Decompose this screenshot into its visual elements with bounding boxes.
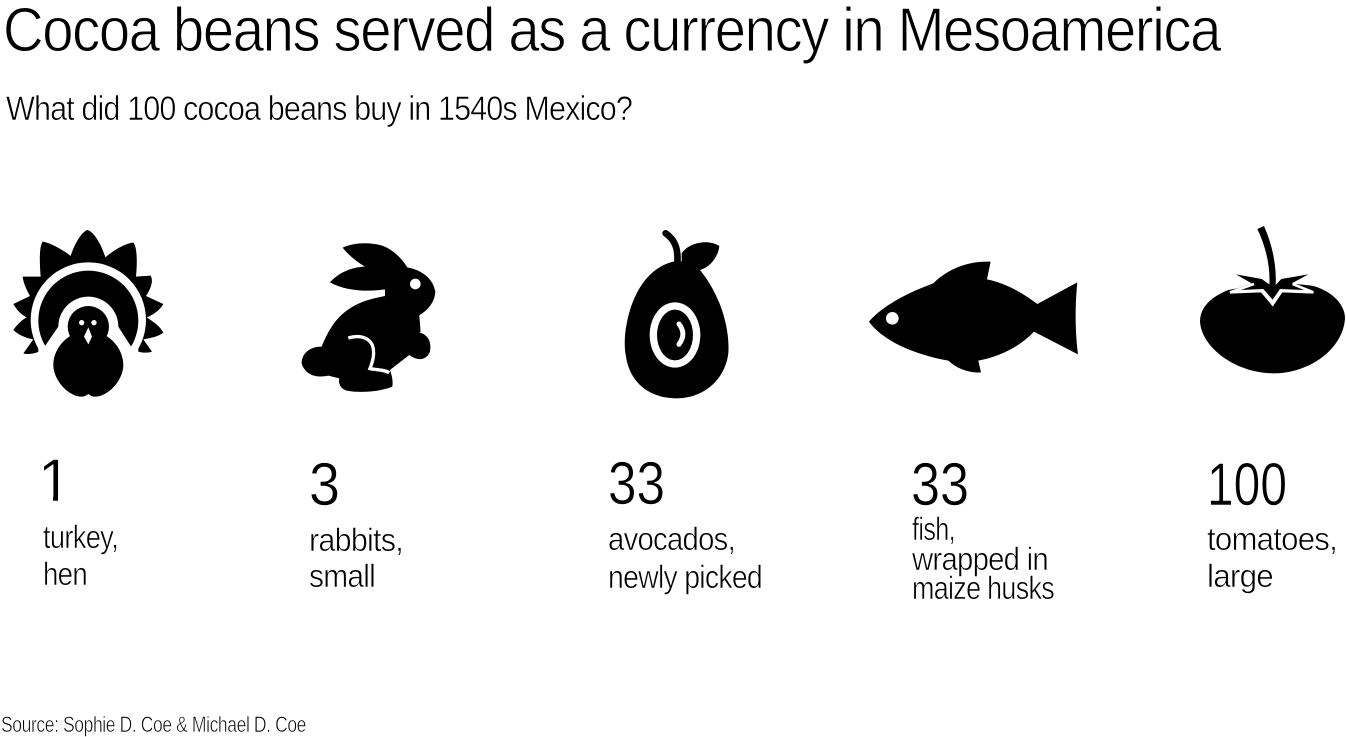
item: tomatoes: 100 (1207, 451, 1287, 518)
item: tomatoes (1207, 451, 1337, 594)
icon: fish (869, 262, 1078, 372)
item: turkey: hen (43, 556, 87, 592)
item: fish (911, 451, 1054, 606)
item: fish: fish, (912, 511, 955, 547)
item: avocados: 33 (608, 450, 665, 517)
item: turkey: 1 (38, 447, 71, 514)
item: rabbits: 3 (309, 451, 340, 518)
icon: rabbit (302, 243, 435, 392)
item: turkey: turkey, (43, 519, 118, 555)
item: tomatoes: large (1207, 558, 1273, 594)
item: fish: wrapped in (911, 541, 1048, 577)
source: Source: Sophie D. Coe & Michael D. Coe (1, 712, 306, 737)
item: tomatoes: tomatoes, (1207, 521, 1337, 557)
icon: tomato (1200, 226, 1345, 373)
item: rabbits: small (309, 558, 375, 594)
subtitle: What did 100 cocoa beans buy in 1540s Mexico? (6, 90, 632, 128)
item: fish: maize husks (912, 570, 1054, 606)
item: avocados: avocados, (608, 521, 735, 557)
item: turkey (38, 447, 118, 592)
icon: avocado (625, 233, 729, 398)
item: rabbits: rabbits, (309, 522, 403, 558)
item: avocados (608, 450, 762, 595)
icon: turkey (13, 230, 163, 397)
item: rabbits (309, 451, 403, 594)
item: avocados: newly picked (608, 559, 762, 595)
item: fish: 33 (911, 451, 969, 518)
